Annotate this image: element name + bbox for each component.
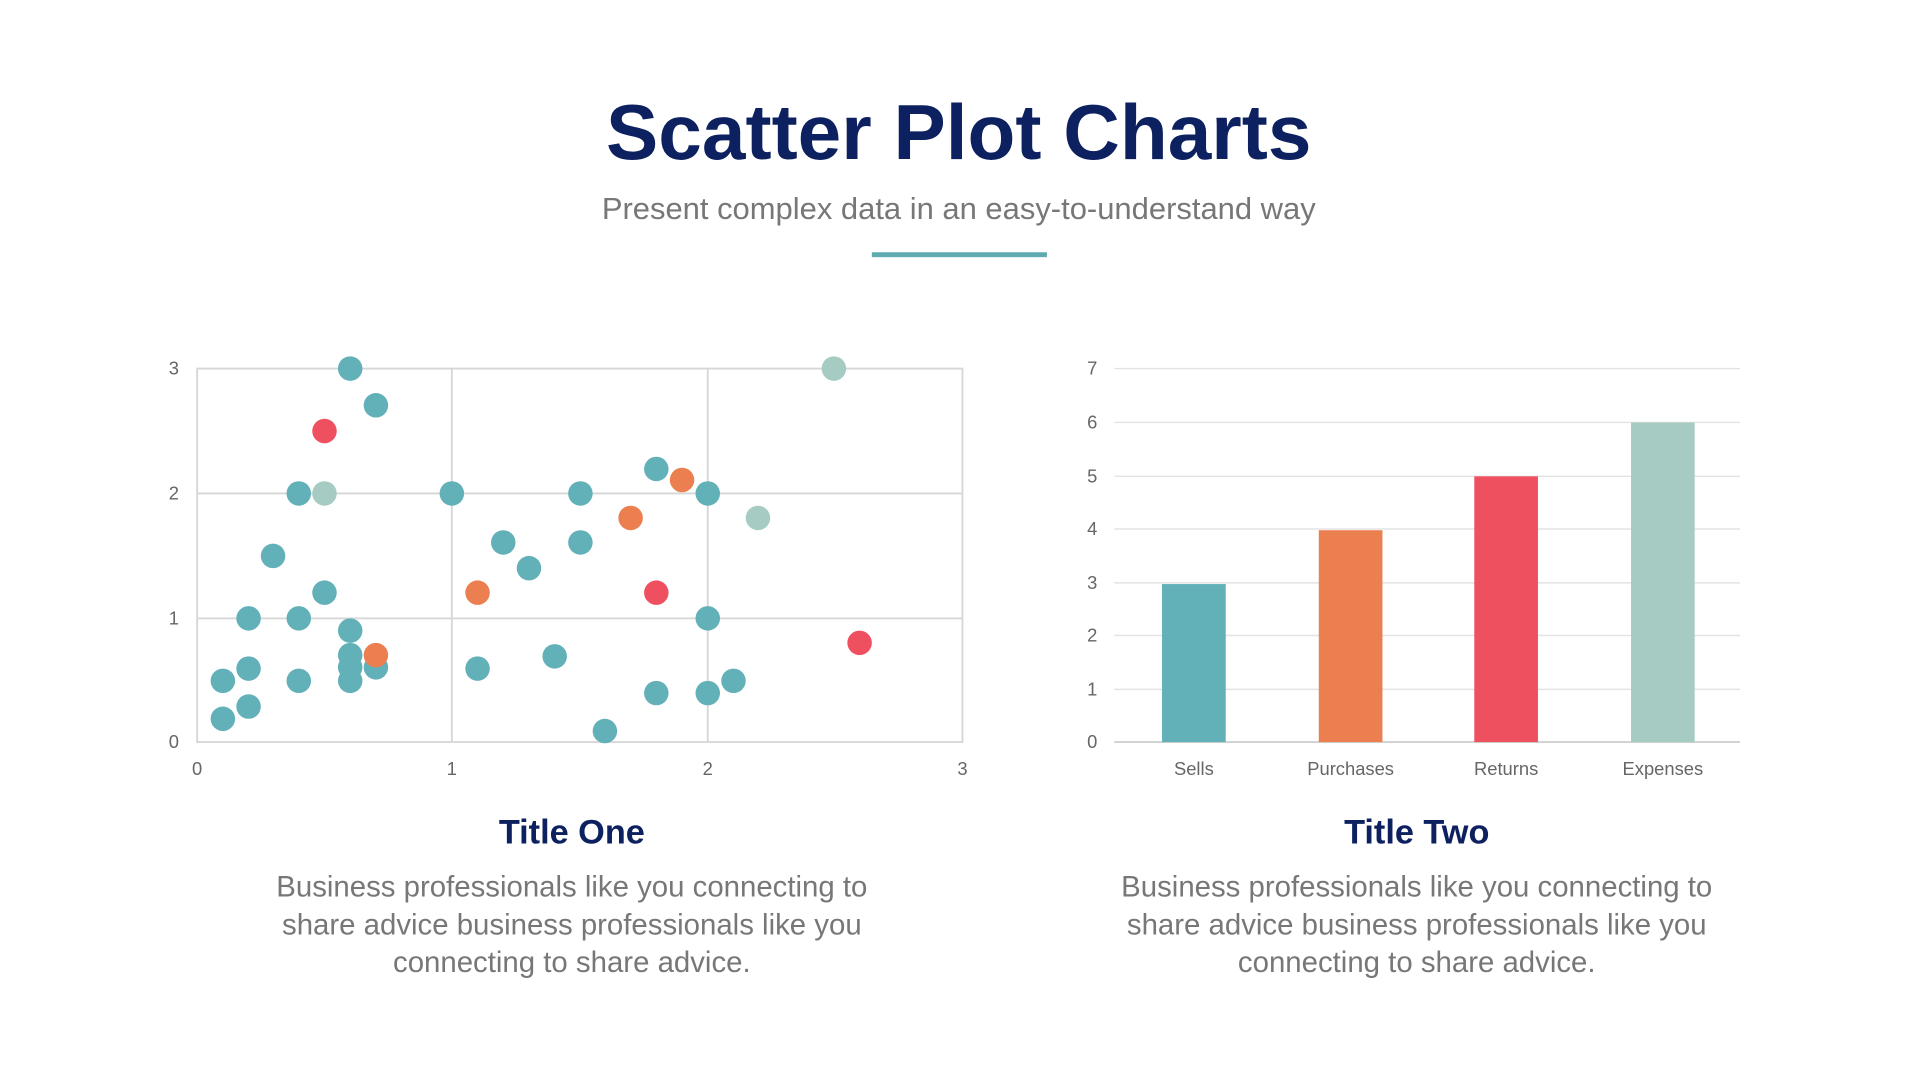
- bar chart: [1087, 358, 1740, 779]
- scatter chart: 2: [703, 758, 713, 779]
- subtitle: Present complex data in an easy-to-understand way: [602, 192, 1316, 226]
- title: Scatter Plot Charts: [606, 88, 1311, 176]
- bar chart: 2: [1087, 625, 1097, 646]
- text block: title two: Title Two: [1344, 814, 1489, 852]
- text block: title one: [276, 814, 867, 979]
- text block: title one: Title One: [499, 814, 645, 852]
- bar chart: 7: [1087, 358, 1097, 379]
- bar chart: 1: [1087, 679, 1097, 700]
- bar chart: Returns: [1474, 758, 1538, 779]
- text block: title one: share advice business professionals like you: [282, 908, 862, 941]
- bar chart: 6: [1087, 412, 1097, 433]
- bar chart: Purchases: [1307, 758, 1394, 779]
- scatter chart: 3: [957, 758, 968, 779]
- scatter chart: [169, 356, 968, 779]
- bar chart: 3: [1087, 572, 1097, 593]
- scatter chart: 1: [447, 758, 457, 779]
- text block: title two: Business professionals like you connecting to: [1121, 870, 1712, 903]
- text block: title one: connecting to share advice.: [393, 946, 751, 979]
- bar chart: 4: [1087, 518, 1097, 539]
- text block: title two: connecting to share advice.: [1238, 946, 1596, 979]
- bar chart: 0: [1087, 731, 1097, 752]
- text block: title two: [1121, 814, 1712, 979]
- scatter chart: 0: [169, 731, 179, 752]
- scatter chart: 1: [169, 607, 179, 628]
- bar chart: Expenses: [1623, 758, 1703, 779]
- scatter chart: 0: [192, 758, 202, 779]
- scatter chart: 2: [169, 483, 179, 504]
- bar chart: Sells: [1174, 758, 1214, 779]
- text block: title two: share advice business professionals like you: [1127, 908, 1707, 941]
- text block: title one: Business professionals like you connecting to: [276, 870, 867, 903]
- accent underline: [872, 252, 1047, 257]
- scatter chart: 3: [169, 358, 179, 379]
- bar chart: 5: [1087, 465, 1097, 486]
